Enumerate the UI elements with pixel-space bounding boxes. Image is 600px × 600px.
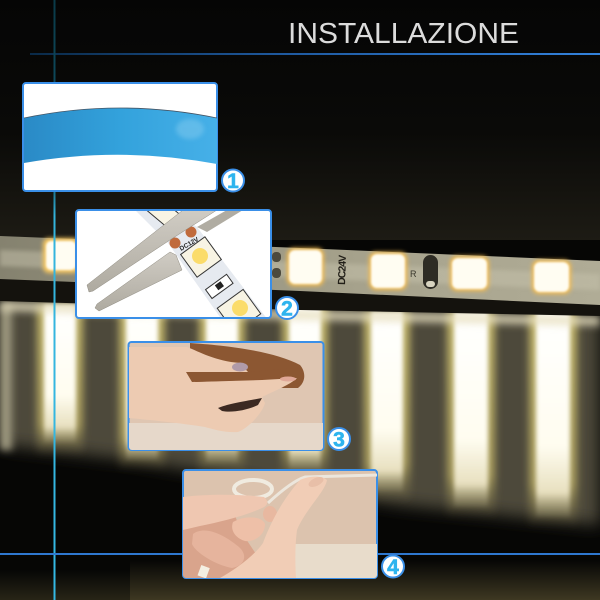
palm: [183, 518, 255, 578]
white LED strip: [136, 211, 266, 317]
badge 4: [382, 556, 404, 579]
title: INSTALLAZIONE: [288, 18, 519, 50]
strip print: DC24V: DC24V: [336, 255, 349, 285]
LED strip being applied: [268, 475, 377, 503]
badge 1: [222, 170, 244, 193]
blue tape strip: [24, 108, 217, 164]
badge 2: 2: [281, 298, 293, 320]
LED strip: R: [410, 269, 417, 279]
panel 2: cutting strip with scissors: DC12V: [178, 236, 201, 253]
panel 3: wiping surface with cloth: [128, 342, 324, 451]
strip on hand: [198, 565, 210, 578]
panel 4: applying strip by hand: [183, 470, 377, 578]
lower finger: [192, 531, 244, 568]
scissors blades: [87, 210, 217, 292]
panel 1: blue tape: [23, 83, 217, 191]
middle fingertip: [232, 517, 265, 541]
badge 3: 3: [333, 428, 345, 452]
guide line: horizontal top: [30, 53, 600, 55]
badge 2: [276, 297, 298, 320]
thumb: [220, 477, 327, 578]
upper finger: [183, 495, 267, 530]
badge 1: 1: [227, 170, 239, 193]
LED strip: [0, 236, 600, 305]
panel 2: cutting strip with scissors: [75, 209, 272, 319]
guide line: horizontal bottom: [0, 553, 600, 555]
badge 4: 4: [387, 556, 399, 579]
copper pads: [170, 238, 180, 248]
finger shadow: [218, 398, 262, 412]
guide line: vertical: [54, 0, 56, 600]
badge 3: [328, 428, 350, 452]
dark gap under strip: [0, 276, 600, 316]
cloth: [190, 343, 304, 388]
reflective surface with light columns: [0, 300, 600, 600]
hand: [129, 347, 297, 432]
